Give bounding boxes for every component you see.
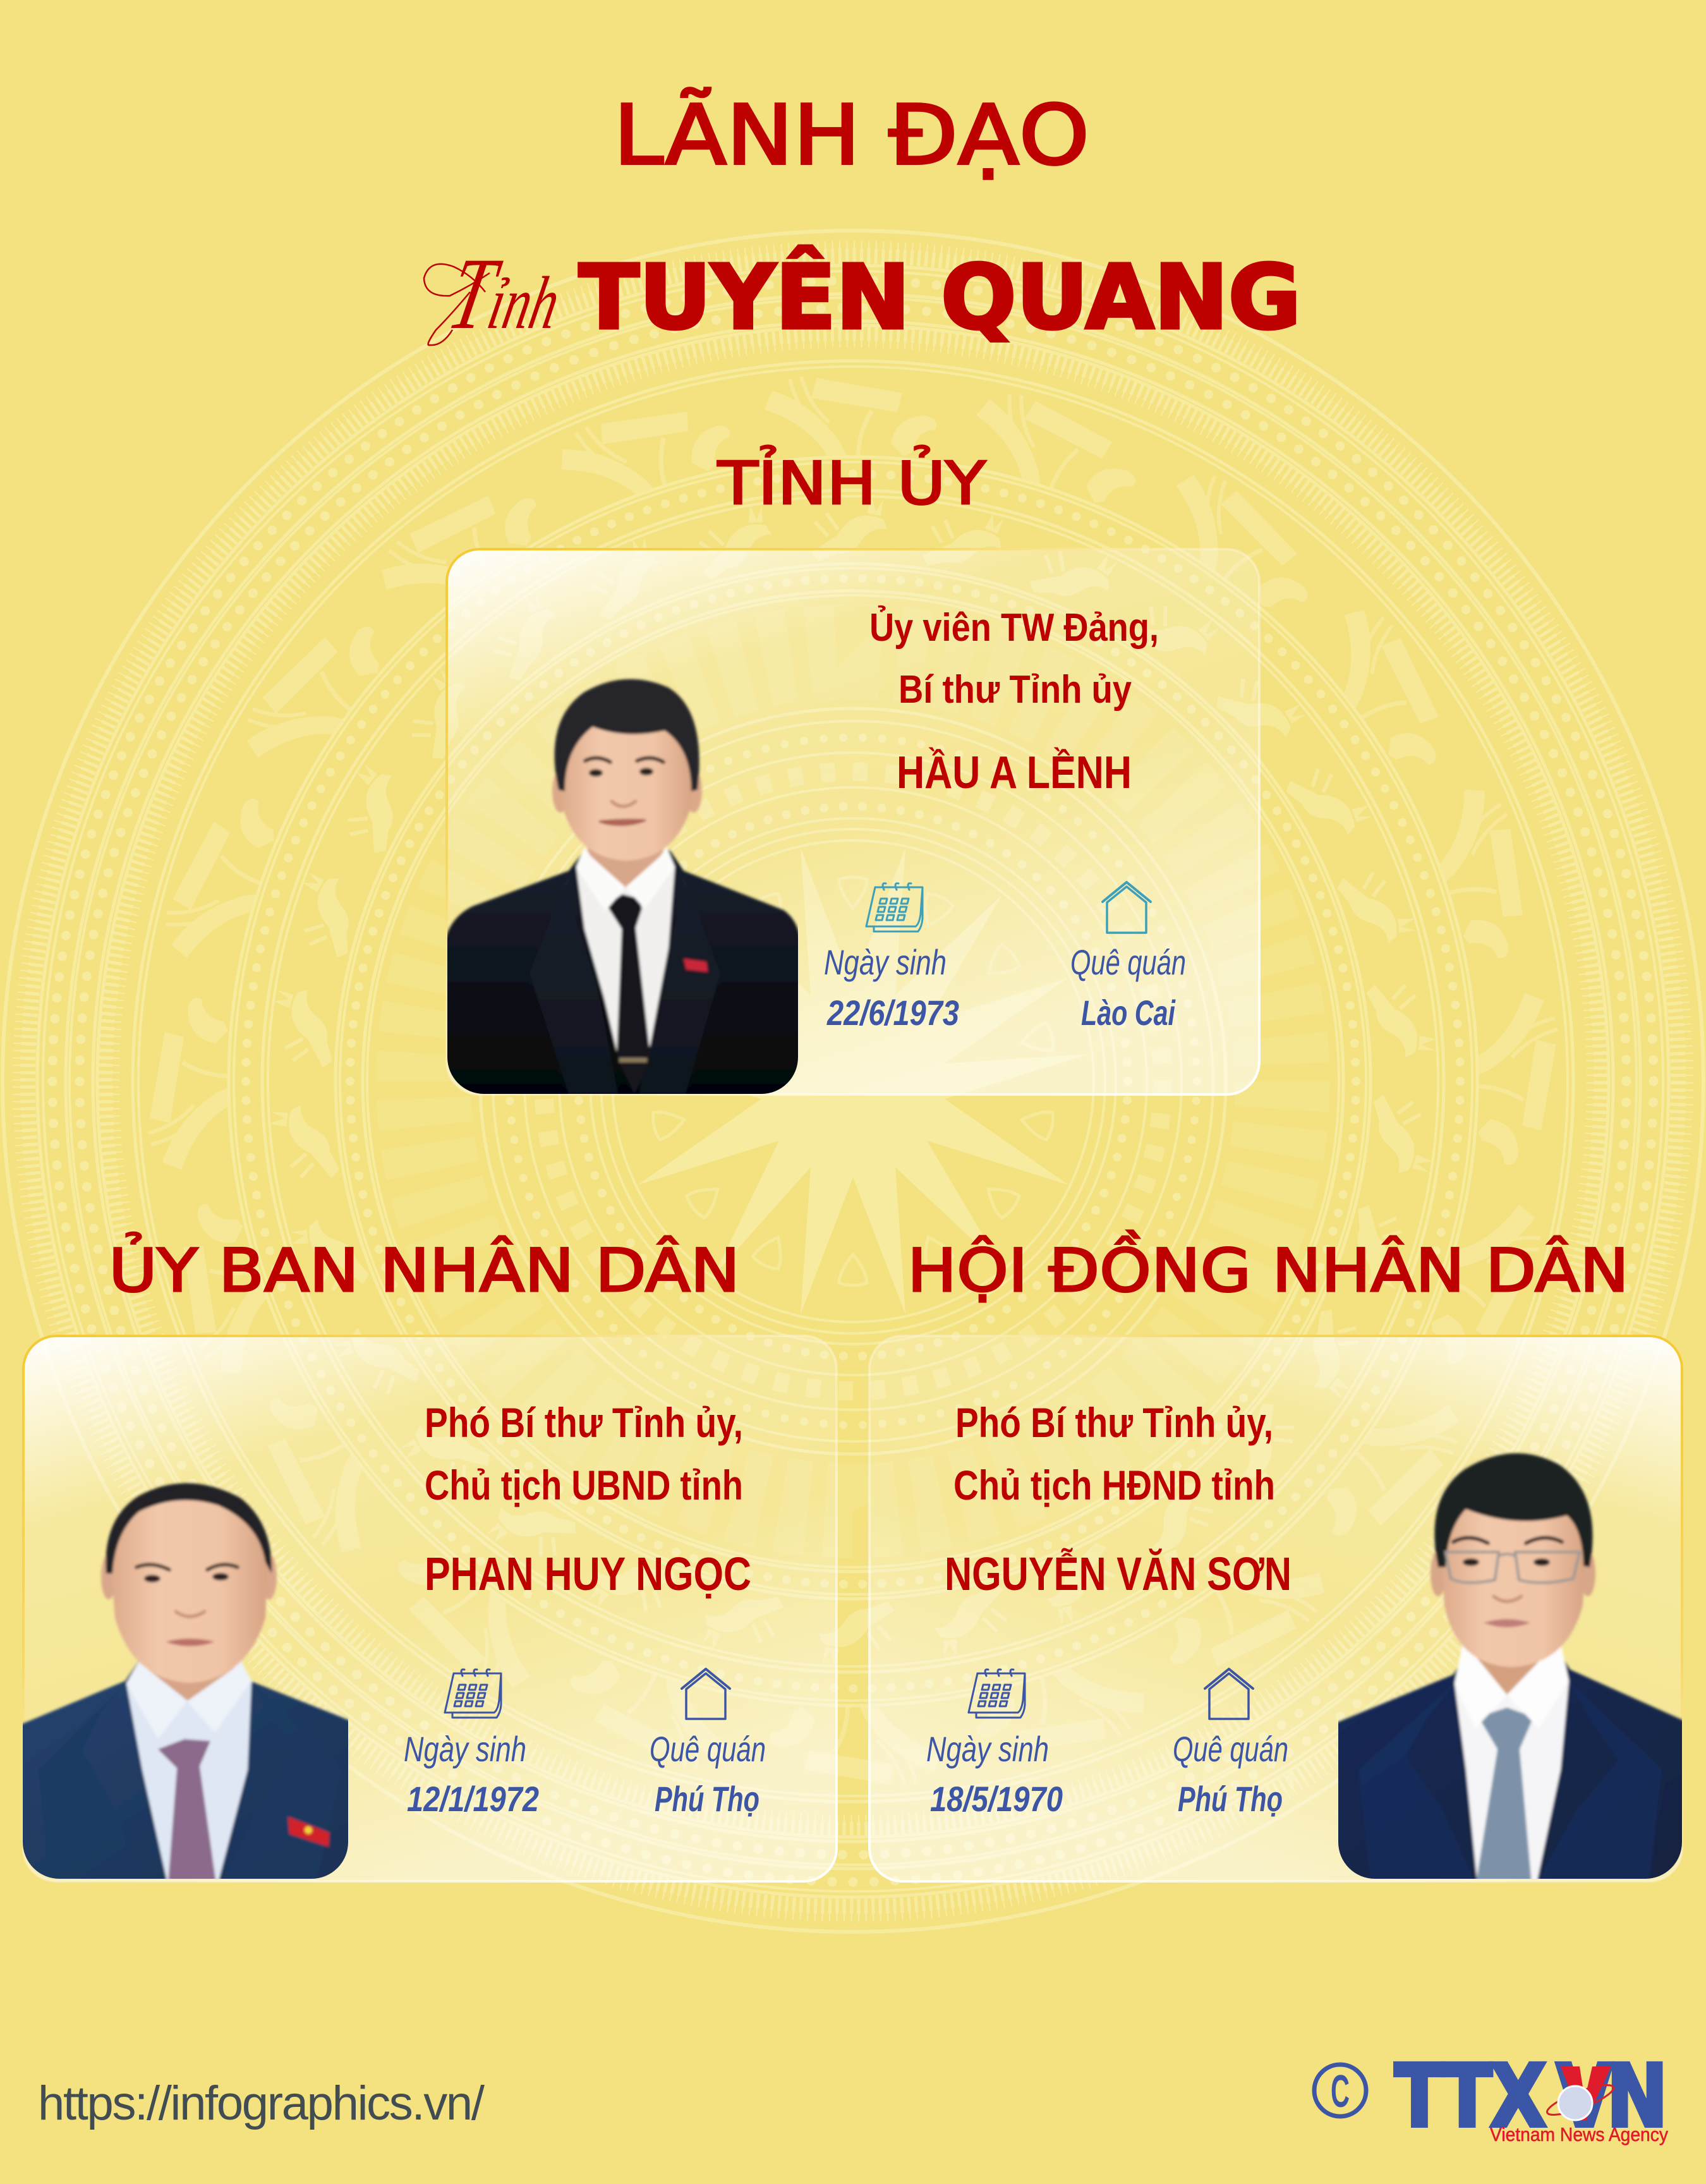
role: Bí thư Tỉnh ủy: Bí thư Tỉnh ủy	[898, 668, 1132, 712]
photo: Hầu A Lềnh	[442, 679, 801, 1100]
icon: calendar	[445, 1670, 501, 1718]
label: Quê quán: Quê quán	[650, 1729, 766, 1769]
icon: house	[1205, 1669, 1253, 1719]
logo: red V	[1561, 2066, 1611, 2121]
label: Quê quán: Quê quán	[1173, 1729, 1288, 1769]
name: Phan Huy Ngọc: PHAN HUY NGỌC	[425, 1548, 751, 1600]
icon: calendar	[866, 883, 923, 931]
value: birth date: 12/1/1972	[407, 1779, 539, 1819]
icon: copyright	[1314, 2065, 1366, 2117]
logo: globe	[1558, 2086, 1592, 2120]
bronze drum pattern	[3, 231, 1703, 1932]
value: home town: Lào Cai	[1081, 993, 1176, 1033]
label: Quê quán: Quê quán	[1070, 942, 1186, 982]
icon: house	[1103, 882, 1151, 933]
label: Ngày sinh: Ngày sinh	[926, 1729, 1049, 1769]
heading: ỦY BAN NHÂN DÂN: ỦY BAN NHÂN DÂN	[109, 1232, 740, 1306]
title: LÃNH ĐẠO: LÃNH ĐẠO	[614, 87, 1089, 183]
drum outer band figures	[148, 377, 1558, 1786]
icon: calendar	[969, 1670, 1025, 1718]
photo: Phan Huy Ngọc	[19, 1483, 354, 1883]
logo: TTXVN: TTXVN	[1394, 2046, 1667, 2146]
value: home town: Phú Thọ	[655, 1779, 759, 1819]
icon: house	[682, 1669, 730, 1719]
logo: tagline: Vietnam News Agency	[1490, 2123, 1668, 2145]
value: home town: Phú Thọ	[1178, 1779, 1283, 1819]
role: Chủ tịch HĐND tỉnh: Chủ tịch HĐND tỉnh	[953, 1462, 1275, 1508]
card background	[869, 1336, 1682, 1881]
drum star with 14 rays	[617, 848, 1089, 1314]
panel: HĐND card	[869, 1336, 1687, 1883]
drum bird band	[267, 497, 1439, 1666]
label: Ngày sinh: Ngày sinh	[824, 942, 947, 982]
name: Nguyễn Văn Sơn: NGUYỄN VĂN SƠN	[945, 1548, 1292, 1600]
value: birth date: 22/6/1973	[826, 993, 959, 1033]
heading: HỘI ĐỒNG NHÂN DÂN: HỘI ĐỒNG NHÂN DÂN	[907, 1229, 1629, 1306]
value: birth date: 18/5/1970	[930, 1779, 1063, 1819]
role: Phó Bí thư Tỉnh ủy: Phó Bí thư Tỉnh ủy,	[425, 1399, 743, 1446]
panel: UBND card	[19, 1336, 837, 1883]
card background	[447, 549, 1259, 1095]
icon: copyright: C	[1331, 2066, 1350, 2117]
card background	[23, 1336, 837, 1881]
panel: Tỉnh ủy card	[442, 549, 1259, 1100]
title: Tỉnh script: Tỉnh	[440, 236, 572, 350]
title: TUYÊN QUANG: TUYÊN QUANG	[579, 245, 1301, 349]
label: Ngày sinh: Ngày sinh	[404, 1729, 526, 1769]
logo: orbit	[1544, 2080, 1616, 2120]
photo: Nguyễn Văn Sơn	[1333, 1453, 1687, 1883]
drum rings	[3, 231, 1703, 1932]
name: Hầu A Lềnh: HẦU A LỀNH	[897, 747, 1132, 798]
drum pods between rays	[651, 877, 1055, 1285]
role: Ủy viên TW Đảng: Ủy viên TW Đảng,	[869, 606, 1159, 650]
role: Phó Bí thư Tỉnh ủy: Phó Bí thư Tỉnh ủy,	[955, 1399, 1273, 1446]
role: Chủ tịch UBND tỉnh: Chủ tịch UBND tỉnh	[425, 1462, 743, 1508]
footer url: https://infographics.vn/	[38, 2077, 485, 2130]
heading: TỈNH ỦY: TỈNH ỦY	[717, 445, 986, 518]
